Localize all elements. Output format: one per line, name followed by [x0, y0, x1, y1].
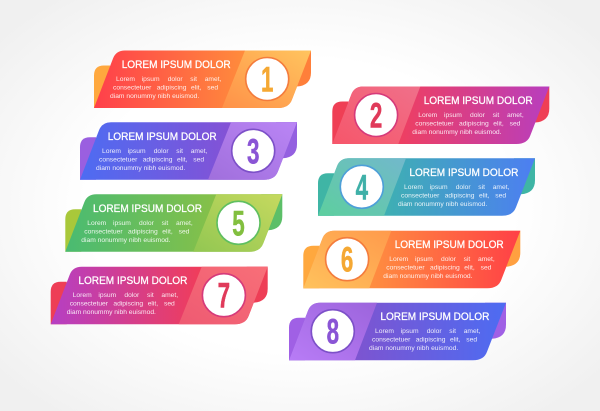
text block: sit [176, 148, 183, 155]
text block: diam nonummy nibh euismod. [81, 237, 171, 244]
text block: elit, [177, 156, 188, 163]
text block: sit [449, 328, 456, 335]
number badge 4 [340, 165, 383, 208]
text block: elit, [148, 301, 158, 308]
text block: elit, [162, 228, 173, 235]
heading: LOREM IPSUM DOLOR [380, 311, 489, 323]
heading: LOREM IPSUM DOLOR [409, 167, 518, 179]
text block: amet, [478, 256, 495, 263]
text block: dolor [427, 328, 442, 335]
text block: sed [179, 228, 190, 235]
text block: dolor [456, 184, 471, 191]
text block: ipsum [128, 148, 146, 155]
text block: adipiscing [143, 156, 173, 163]
heading: LOREM IPSUM DOLOR [108, 131, 217, 143]
number badge 6 [326, 238, 369, 281]
text block: ipsum [142, 76, 160, 83]
text block: sit [147, 292, 154, 299]
text block: Lorem [418, 112, 438, 119]
number badge 7: 7 [218, 277, 230, 316]
text block: dolor [124, 292, 140, 299]
number badge 8: 8 [327, 313, 339, 352]
text block: Lorem [73, 292, 92, 299]
text block: ipsum [444, 112, 462, 119]
text block: Lorem [389, 256, 409, 263]
text block: dolor [441, 256, 457, 263]
text block: ipsum [98, 292, 117, 299]
number badge 3: 3 [247, 132, 259, 172]
text block: diam nonummy nibh euismod. [96, 165, 185, 172]
text block: Lorem [87, 220, 107, 227]
text block: diam nonummy nibh euismod. [67, 309, 156, 316]
text block: dolor [139, 220, 155, 227]
text block: diam nonummy nibh euismod. [412, 129, 502, 136]
text block: amet, [205, 76, 222, 83]
text block: Lorem [116, 76, 135, 83]
text block: sed [164, 301, 175, 308]
number badge 7 [202, 274, 245, 317]
text block: amet, [493, 184, 510, 191]
text block: adipiscing [416, 337, 446, 344]
text block: amet, [464, 328, 481, 335]
text block: adipiscing [430, 265, 460, 272]
text block: sed [193, 156, 204, 163]
text block: amet, [161, 292, 178, 299]
text block: elit, [191, 84, 202, 92]
text block: Lorem [404, 184, 423, 191]
text block: diam nonummy nibh euismod. [383, 273, 473, 280]
text block: sit [478, 184, 485, 191]
panel: card 3 [80, 122, 297, 180]
text block: adipiscing [459, 120, 489, 128]
text block: consectetuer [84, 228, 123, 235]
text block: adipiscing [128, 228, 158, 235]
heading: LOREM IPSUM DOLOR [424, 95, 533, 107]
panel: card 5 [65, 194, 282, 252]
text block: sit [162, 220, 168, 227]
text block: dolor [154, 148, 169, 155]
text block: consectetuer [113, 84, 152, 92]
number badge 2 [355, 94, 398, 136]
text block: consectetuer [99, 156, 138, 163]
text block: amet, [176, 220, 193, 227]
text block: diam nonummy nibh euismod. [369, 345, 458, 352]
panel: card 2 [332, 86, 549, 144]
heading: LOREM IPSUM DOLOR [78, 275, 187, 287]
text block: sed [510, 120, 521, 128]
text block: consectetuer [70, 301, 109, 308]
number badge 5: 5 [232, 204, 245, 244]
text block: adipiscing [113, 301, 143, 308]
text block: dolor [470, 112, 486, 119]
number badge 6: 6 [341, 241, 353, 280]
text block: sit [190, 76, 197, 83]
text block: dolor [168, 76, 183, 83]
text block: ipsum [401, 328, 419, 335]
text block: sed [495, 192, 506, 199]
text block: sit [464, 256, 470, 263]
number badge 4: 4 [356, 168, 369, 208]
text block: elit, [450, 337, 461, 344]
text block: adipiscing [157, 84, 187, 92]
panel: card 8 [289, 303, 506, 360]
number badge 3 [232, 129, 275, 172]
heading: LOREM IPSUM DOLOR [122, 59, 231, 71]
text block: diam nonummy nibh euismod. [110, 93, 199, 100]
panel: card 6 [303, 231, 520, 288]
text block: amet, [507, 112, 524, 119]
heading: LOREM IPSUM DOLOR [93, 203, 202, 215]
text block: sit [493, 112, 499, 119]
text block: sed [481, 265, 492, 272]
text block: consectetuer [415, 120, 454, 128]
panel: card 1 [94, 50, 311, 108]
text block: diam nonummy nibh euismod. [398, 201, 487, 208]
text block: Lorem [375, 328, 394, 335]
text block: ipsum [430, 184, 448, 191]
text block: consectetuer [372, 337, 411, 344]
panel: card 7 [51, 267, 268, 324]
text block: elit, [464, 265, 475, 272]
text block: consectetuer [401, 192, 440, 199]
panel: card 4 [318, 158, 535, 216]
number badge 1 [246, 58, 289, 100]
text block: sed [466, 337, 477, 344]
text block: adipiscing [445, 192, 475, 199]
text block: amet, [191, 148, 208, 155]
number badge 2: 2 [370, 97, 382, 136]
text block: elit, [479, 192, 490, 199]
number badge 8 [311, 310, 354, 353]
number badge 5 [217, 201, 260, 244]
heading: LOREM IPSUM DOLOR [395, 239, 504, 251]
text block: ipsum [113, 220, 131, 227]
number badge 1: 1 [261, 61, 273, 100]
text block: Lorem [102, 148, 121, 155]
text block: sed [207, 84, 218, 92]
text block: ipsum [415, 256, 433, 263]
text block: elit, [493, 120, 504, 128]
text block: consectetuer [386, 265, 425, 272]
